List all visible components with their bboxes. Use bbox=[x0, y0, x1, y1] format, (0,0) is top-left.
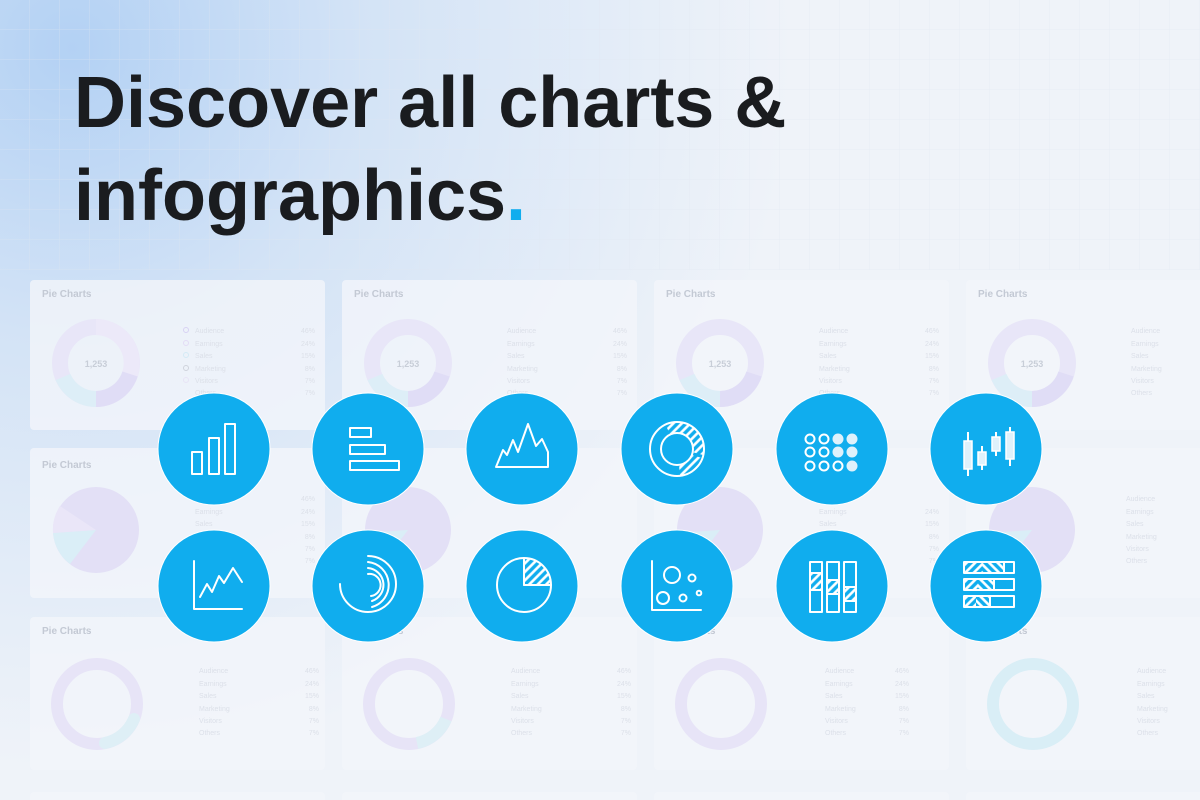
card row 1: Earnings bbox=[507, 341, 535, 348]
card row 3: 7% bbox=[309, 730, 319, 737]
card row 3: 7% bbox=[899, 730, 909, 737]
card row 3 bbox=[30, 617, 1200, 770]
card row 2: 7% bbox=[305, 546, 315, 553]
icon: bubble chart bbox=[621, 530, 733, 642]
card row 1: 7% bbox=[617, 378, 627, 385]
card row 2: Sales bbox=[819, 521, 837, 528]
card row 3: 24% bbox=[617, 681, 631, 688]
card row 1: Marketing bbox=[819, 366, 850, 373]
icon: radial rings bbox=[312, 530, 424, 642]
card row 2: Earnings bbox=[195, 509, 223, 516]
icon: dot matrix bbox=[776, 393, 888, 505]
card row 3: 24% bbox=[305, 681, 319, 688]
card row 1: 24% bbox=[925, 341, 939, 348]
card row 2: Others bbox=[195, 558, 217, 565]
card row 3: Audience bbox=[511, 668, 540, 675]
card row 3: Sales bbox=[825, 693, 843, 700]
card row 3: Earnings bbox=[1137, 681, 1165, 688]
card row 1: 7% bbox=[929, 378, 939, 385]
card row 1: Earnings bbox=[1131, 341, 1159, 348]
card row 2: 7% bbox=[929, 546, 939, 553]
card row 3: Visitors bbox=[511, 718, 534, 725]
card row 3: Audience bbox=[199, 668, 228, 675]
card row 2: 8% bbox=[305, 534, 315, 541]
card row 3: 46% bbox=[895, 668, 909, 675]
card row 3: 7% bbox=[899, 718, 909, 725]
card row 3: Marketing bbox=[1137, 706, 1168, 713]
icon: candlestick bbox=[930, 393, 1042, 505]
card row 2: Marketing bbox=[1126, 534, 1157, 541]
card row 3: 7% bbox=[621, 718, 631, 725]
card row 3: Earnings bbox=[825, 681, 853, 688]
card row 2: Earnings bbox=[819, 509, 847, 516]
card row 3: 8% bbox=[309, 706, 319, 713]
card row 1: Sales bbox=[507, 353, 525, 360]
card row 2: Audience bbox=[1126, 496, 1155, 503]
card row 1: Marketing bbox=[507, 366, 538, 373]
card row 1: Earnings bbox=[819, 341, 847, 348]
title bbox=[74, 63, 786, 236]
card row 1: 1,253 bbox=[709, 359, 731, 369]
card row 1: 1,253 bbox=[85, 359, 107, 369]
card row 3: Earnings bbox=[511, 681, 539, 688]
card row 3: Audience bbox=[1137, 668, 1166, 675]
icon: line chart bbox=[158, 530, 270, 642]
icon: pie hatched bbox=[466, 530, 578, 642]
card row 2: 7% bbox=[305, 558, 315, 565]
card row 1: 8% bbox=[617, 366, 627, 373]
card row 2: 24% bbox=[925, 509, 939, 516]
card row 3: Others bbox=[1137, 730, 1159, 737]
card row 1: Audience bbox=[195, 328, 224, 335]
card row 2: Visitors bbox=[1126, 546, 1149, 553]
card row 3: Marketing bbox=[511, 706, 542, 713]
card row 1: Pie Charts bbox=[354, 289, 404, 300]
card row 3: Audience bbox=[825, 668, 854, 675]
icon: area chart bbox=[466, 393, 578, 505]
card row 3: Visitors bbox=[1137, 718, 1160, 725]
card row 3: 15% bbox=[305, 693, 319, 700]
card row 3: 7% bbox=[621, 730, 631, 737]
card row 3: 46% bbox=[617, 668, 631, 675]
card row 1: Pie Charts bbox=[42, 289, 92, 300]
card row 3: 46% bbox=[305, 668, 319, 675]
card row 2: 7% bbox=[929, 558, 939, 565]
card row 1: Others bbox=[195, 390, 217, 397]
card row 1: Visitors bbox=[1131, 378, 1154, 385]
card row 3: Sales bbox=[511, 693, 529, 700]
card row 3: 8% bbox=[621, 706, 631, 713]
card row 3: 7% bbox=[309, 718, 319, 725]
card row 1: Audience bbox=[819, 328, 848, 335]
icon: bar chart bbox=[158, 393, 270, 505]
card row 2: 8% bbox=[929, 534, 939, 541]
card row 1: 24% bbox=[301, 341, 315, 348]
card row 3: Visitors bbox=[199, 718, 222, 725]
card row 3: Pie Charts bbox=[42, 626, 92, 637]
card row 2: Audience bbox=[195, 496, 224, 503]
card row 1: 1,253 bbox=[1021, 359, 1043, 369]
card row 1: Others bbox=[819, 390, 841, 397]
card row 1: Earnings bbox=[195, 341, 223, 348]
icon: stacked horizontal bars bbox=[930, 530, 1042, 642]
card row 3: Others bbox=[199, 730, 221, 737]
card row 2: Pie Charts bbox=[42, 460, 92, 471]
card row 1: 24% bbox=[613, 341, 627, 348]
card row 2: Marketing bbox=[195, 534, 226, 541]
card row 3: 15% bbox=[895, 693, 909, 700]
card row 1: Audience bbox=[507, 328, 536, 335]
card row 2: Others bbox=[1126, 558, 1148, 565]
card row 3: Pie Charts bbox=[354, 626, 404, 637]
card row 1: 8% bbox=[929, 366, 939, 373]
card row 2 bbox=[30, 448, 1200, 598]
title: Discover all charts & bbox=[74, 63, 786, 143]
card row 2: 46% bbox=[301, 496, 315, 503]
card row 1: 46% bbox=[301, 328, 315, 335]
card row 1: Pie Charts bbox=[978, 289, 1028, 300]
card row 1: 15% bbox=[925, 353, 939, 360]
icon: horizontal bars bbox=[312, 393, 424, 505]
card row 1: Visitors bbox=[195, 378, 218, 385]
card row 2: Sales bbox=[1126, 521, 1144, 528]
card row 1: Sales bbox=[195, 353, 213, 360]
card row 1: 7% bbox=[305, 378, 315, 385]
card row 3: Others bbox=[825, 730, 847, 737]
card row 1: Others bbox=[507, 390, 529, 397]
card row 3: 24% bbox=[895, 681, 909, 688]
card row 1: Visitors bbox=[507, 378, 530, 385]
card row 1: 7% bbox=[929, 390, 939, 397]
card row 2: 24% bbox=[301, 509, 315, 516]
card row 2: Sales bbox=[195, 521, 213, 528]
card row 1: 7% bbox=[305, 390, 315, 397]
card row 1: 46% bbox=[925, 328, 939, 335]
card row 2: Earnings bbox=[1126, 509, 1154, 516]
card row 3: Marketing bbox=[199, 706, 230, 713]
icon: hatched donut bbox=[621, 393, 733, 505]
card row 3: Visitors bbox=[825, 718, 848, 725]
icon: stacked columns bbox=[776, 530, 888, 642]
card row 3: Pie Charts bbox=[978, 626, 1028, 637]
card row 3: Sales bbox=[1137, 693, 1155, 700]
title: infographics. bbox=[74, 156, 526, 236]
card row 2: 15% bbox=[925, 521, 939, 528]
card row 1 bbox=[30, 280, 1200, 430]
card row 3: Marketing bbox=[825, 706, 856, 713]
card row 3: Others bbox=[511, 730, 533, 737]
card row 1: Marketing bbox=[195, 366, 226, 373]
card row 3: 8% bbox=[899, 706, 909, 713]
card row 2: 15% bbox=[301, 521, 315, 528]
card row 1: Others bbox=[1131, 390, 1153, 397]
card row 3: Pie Charts bbox=[666, 626, 716, 637]
card row 3: 15% bbox=[617, 693, 631, 700]
card row 1: Sales bbox=[819, 353, 837, 360]
card row 1: Sales bbox=[1131, 353, 1149, 360]
card row 3: Earnings bbox=[199, 681, 227, 688]
card row 1: 7% bbox=[617, 390, 627, 397]
card row 1: 8% bbox=[305, 366, 315, 373]
card row 1: Visitors bbox=[819, 378, 842, 385]
card row 1: 46% bbox=[613, 328, 627, 335]
card row 1: Marketing bbox=[1131, 366, 1162, 373]
card row 2: Visitors bbox=[195, 546, 218, 553]
card row 3: Sales bbox=[199, 693, 217, 700]
card row 1: 15% bbox=[613, 353, 627, 360]
card row 1: 15% bbox=[301, 353, 315, 360]
card row 1: Pie Charts bbox=[666, 289, 716, 300]
card row 1: Audience bbox=[1131, 328, 1160, 335]
background: pie chart cards bbox=[30, 280, 1200, 800]
card row 1: 1,253 bbox=[397, 359, 419, 369]
